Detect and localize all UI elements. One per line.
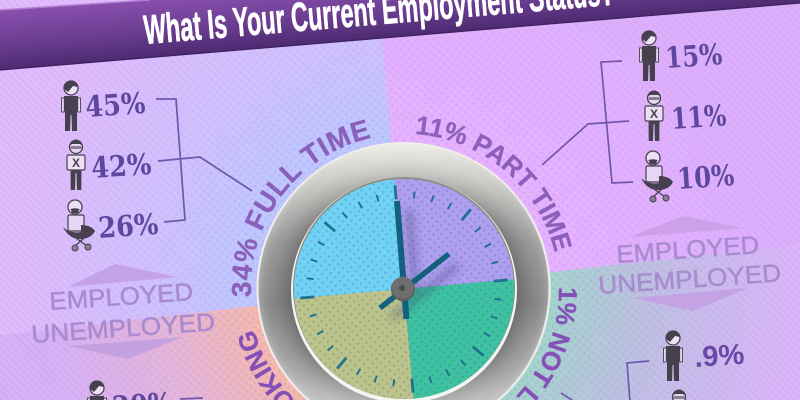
clock <box>256 142 551 400</box>
clock hub <box>391 277 415 301</box>
bracket connector <box>542 61 633 183</box>
icon: young person <box>640 31 658 81</box>
stat: 26%: 26% <box>97 207 159 245</box>
panel: not looking stats <box>561 331 746 400</box>
background panel: looking quadrant <box>0 289 413 400</box>
title banner <box>0 0 800 70</box>
icon: young person <box>62 81 80 131</box>
panel: full time stats <box>62 81 252 251</box>
icon: professional with glasses <box>67 140 85 190</box>
stat: .9%: .9% <box>693 339 746 374</box>
bracket connector <box>156 99 252 222</box>
curved label: 11% part time: 11% PART TIME <box>416 116 572 252</box>
clock tick marks <box>300 185 508 393</box>
label: employed / unemployed left: EMPLOYED <box>48 278 194 316</box>
stat: 10%: 10% <box>676 158 735 196</box>
panel: part time stats <box>542 31 735 202</box>
hour hand <box>380 254 449 308</box>
background panel: part time quadrant <box>379 0 800 289</box>
bracket connector <box>561 361 649 400</box>
icon: young person <box>88 381 106 400</box>
background panel: full time quadrant <box>0 0 404 335</box>
icon: parent with stroller <box>63 200 95 251</box>
clock hand shadows <box>392 210 458 318</box>
connector <box>180 398 203 399</box>
label: employed / unemployed right: EMPLOYED <box>615 231 760 269</box>
icon: professional with glasses <box>670 390 688 400</box>
stat: 15%: 15% <box>664 37 723 75</box>
stat: 45%: 45% <box>84 86 146 124</box>
clock bezel <box>256 142 551 400</box>
icon: parent with stroller <box>641 151 673 202</box>
minute hand <box>397 201 406 319</box>
background panel: not looking quadrant <box>404 244 800 400</box>
label: employed / unemployed right <box>597 216 782 311</box>
stat: 11%: 11% <box>670 98 727 136</box>
icon: young person <box>664 331 682 381</box>
label: employed / unemployed left <box>30 264 216 359</box>
clock face <box>294 179 514 399</box>
label: employed / unemployed right: UNEMPLOYED <box>597 259 782 300</box>
curved label: 34% full time: 34% FULL TIME <box>232 120 370 297</box>
icon: professional with glasses <box>645 90 663 141</box>
stat: 42%: 42% <box>90 147 152 185</box>
panel: looking stats <box>88 381 203 400</box>
label: employed / unemployed left: UNEMPLOYED <box>30 308 216 349</box>
